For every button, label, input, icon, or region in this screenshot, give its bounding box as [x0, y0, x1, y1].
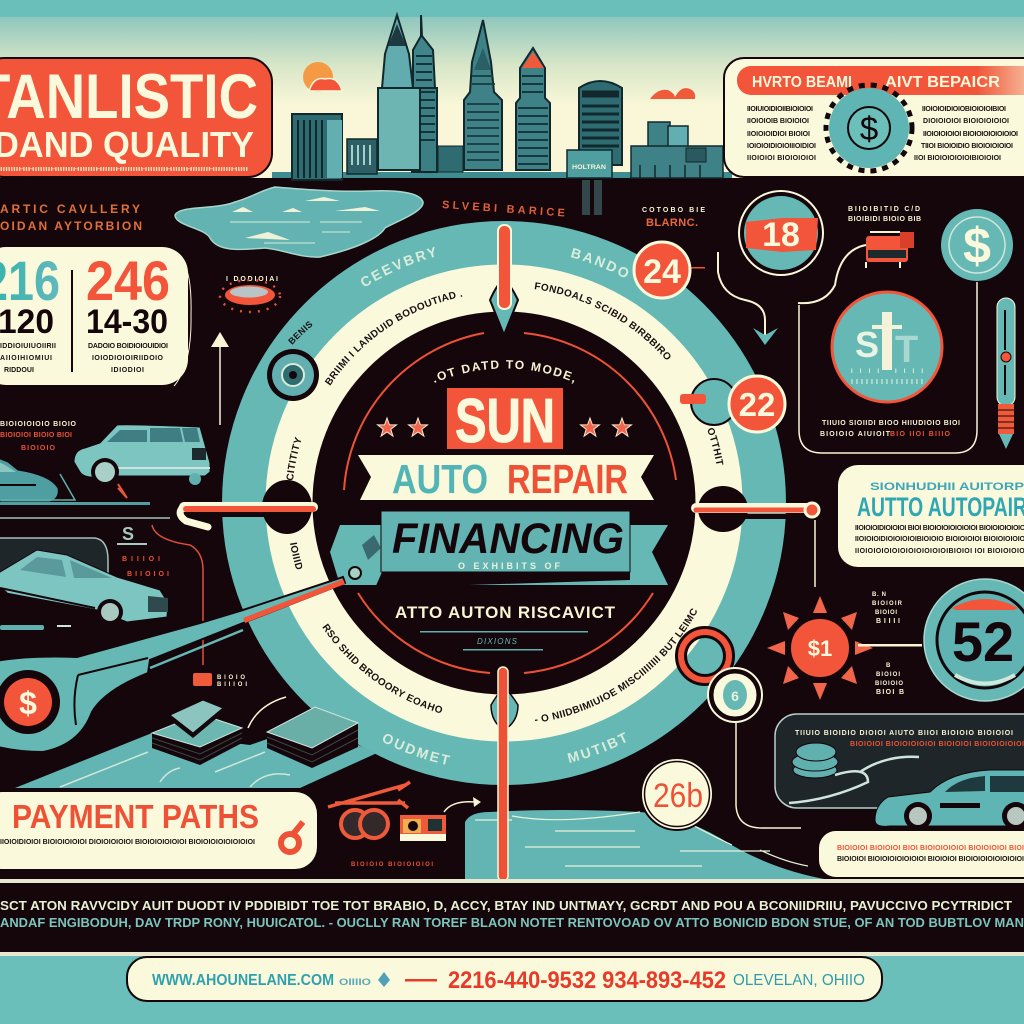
red car icon: [866, 232, 914, 268]
connector to panel: [798, 245, 866, 303]
icon caption: BIOIOIO BIOIOIOIOI: [351, 862, 433, 868]
left lines: [747, 106, 816, 162]
caption above car: [848, 206, 921, 223]
caption above car: BIOIBIDI BIOIO BIB: [848, 216, 921, 223]
gear dollar icon: $: [860, 110, 878, 147]
card lines: IIOIOIOIDIOIOIOI BIOI BIOIOIOIOIOIOIOI BIOIOIOIOIOIOI: [855, 525, 1024, 532]
footer teal: [0, 956, 1024, 1024]
top teal strip: [0, 0, 1024, 17]
curved arrow: [718, 252, 778, 345]
fine print: IDDIOIUIUOIIRII: [0, 343, 56, 350]
sun icon: [303, 62, 342, 92]
stack one: [152, 700, 242, 765]
band captions: IOIIID: [290, 542, 302, 570]
fine print: IOIODIOIOIRIIDOIO: [92, 355, 164, 362]
left lines: IOIOIOIDIOIOIIIOIDIOI: [747, 143, 816, 150]
dollar circle: $: [963, 218, 991, 274]
caption above car: BIIOIBITID C/D: [848, 206, 920, 213]
small caption blue slang: BLARNC.: [646, 217, 698, 229]
goggles: [341, 810, 388, 838]
panel: stats card: [0, 247, 191, 386]
badge 18: 18: [762, 216, 800, 254]
fine print: [0, 343, 168, 374]
right lines: IIOIOIOIOIOI BIOIOIOIOIOIOIOI: [923, 131, 1018, 138]
camera: [400, 815, 446, 841]
red caption: BIOIOIOI BIOIOIOIOIOI BIOIOIOI BIOIOIOIOIOI: [850, 741, 1024, 748]
card stacks: [152, 697, 358, 768]
cable: [789, 757, 919, 803]
ground line: [272, 172, 732, 178]
sun badge: $1: [808, 636, 832, 661]
dial captions: B. N: [872, 592, 886, 598]
bottom pointer: [491, 667, 518, 881]
band captions: CEEVBRY: [361, 246, 435, 286]
dial captions: BIOI B: [876, 689, 904, 696]
badge 22: [680, 376, 785, 432]
low building left: [292, 114, 342, 180]
phone numbers: 2216-440-9532 934-893-452: [448, 967, 726, 994]
subtitle text: OIDAN AYTORBION: [0, 219, 142, 233]
dial captions: BIOIOI: [875, 610, 897, 616]
oval gem icon: [220, 276, 280, 312]
dark line: BIOIOIOI BIOIOIOIOIOIOIOI BIOIOIOI BIOIOIOIOIOIOIOIOI: [837, 856, 1024, 863]
cream inner band: [289, 288, 719, 718]
arched tagline: .OT DATD TO MODE,: [434, 360, 574, 384]
panel caption: TIIUIO SIOIIDI BIOO HIIUDIOIO BIOI: [822, 420, 960, 427]
card lines: IIOIOIOIOIOIOIOIOIOIOIOIBIOIOI IOI BIOIOIOIOI: [855, 548, 1024, 555]
gear dollar icon: [826, 85, 912, 171]
dial captions: BIOIOIR: [872, 601, 903, 607]
left lines: IIOIOIOIDIOI BIOIOI: [747, 131, 810, 138]
subtitle text: ARTIC CAVLLERY: [0, 202, 140, 216]
band captions: RSO SHID BROOORY EOAHO: [322, 624, 442, 713]
right lines: TIIOI BIOIOIDIO BIOIOIOIOIOI: [921, 143, 1013, 150]
ST circle: [832, 292, 942, 402]
stack two: [267, 707, 358, 768]
ST circle: S: [855, 324, 879, 365]
header text right: AIVT BEPAICR: [885, 74, 1000, 91]
panel: lower right note card: [818, 830, 1024, 878]
header text left: HVRTO BEAMI: [752, 74, 852, 91]
handle left: [180, 507, 313, 527]
lake: [175, 187, 423, 257]
dial captions: [872, 592, 904, 696]
cream ribbon: AUTO: [392, 456, 488, 502]
right lines: DIOIOIOIOI BIOIOIOIOIOI: [923, 118, 1009, 125]
dial captions: BIOIOI: [876, 672, 900, 678]
payment fine print: IIOIOIDIOIOI BIOIOIOIOIOI DIOIOIOIOIOI BIOIOIOIOIOIOI BIOIOIOIOIOIOIOIOI: [0, 839, 255, 846]
tower pair: [378, 15, 463, 172]
oval gem icon: I DODIOIAI: [226, 276, 278, 283]
teal road: [15, 733, 377, 788]
left captions: BIOIOIOIOIO BIOIO: [0, 421, 77, 428]
band captions: OUDMET: [383, 734, 450, 764]
left captions: BIOIOIO: [21, 445, 56, 452]
cream ribbon: REPAIR: [507, 456, 628, 502]
connector: [152, 525, 203, 665]
red line: BIOIOIOI BIOIOIOI BIOI BIOIOIOIOIOI BIOIOIOIOI BIOI: [837, 845, 1024, 852]
panel: lower right with car: [775, 714, 1024, 830]
ring caption: SLVEBI BARICE: [442, 199, 567, 220]
left captions: [0, 421, 77, 452]
small legend icon: [193, 673, 247, 688]
wrench dollar: [0, 670, 60, 734]
fine print: RIDDOUI: [4, 367, 34, 374]
notch right: [698, 486, 748, 532]
pier posts: [582, 180, 602, 215]
fine print: IDIODIOI: [111, 367, 144, 374]
band captions: BENIS: [288, 321, 312, 345]
connector down: [736, 722, 801, 828]
left lines: IIOIUIOIDIOIIBIOIOIOI: [747, 106, 813, 113]
wrench pivot: [349, 567, 361, 579]
payment icon: [281, 822, 303, 852]
heading line 2: DAND QUALITY: [0, 124, 254, 165]
website: WWW.AHOUNELANE.COM: [152, 972, 334, 989]
circle 26b: [641, 758, 713, 830]
arrow: [444, 797, 481, 812]
caption: TIIUIO BIOIDIO DIOIOI AIUTO BIIOI BIOIOIO BIOIOIOI: [795, 730, 1013, 737]
stat 246: 246: [86, 249, 170, 312]
dial captions: BIOIOIO: [875, 681, 903, 687]
ST circle: T: [895, 329, 918, 371]
red header pill: [737, 66, 1024, 95]
teal token: [708, 668, 762, 722]
band captions: MUTIBT: [567, 732, 626, 763]
stars: [378, 418, 632, 436]
teal outer band: [244, 243, 764, 763]
emblem rules and small label: DIXIONS: [477, 637, 518, 646]
road dashes: [0, 625, 71, 630]
small teal car: [0, 455, 75, 502]
right lines: IIOIOIOIDIOIOBIOIOIOIBIOI: [922, 106, 1006, 113]
band captions: OTTHIT: [708, 428, 724, 465]
center emblem: [330, 360, 668, 650]
sun badge: [767, 596, 873, 700]
left lines: IIOIOIOIB BIOIOIOI: [747, 118, 809, 125]
central spire tower: [464, 20, 502, 170]
caption: [117, 524, 169, 578]
notch left: [262, 480, 312, 534]
caption: BIIOIOI: [127, 571, 169, 578]
fine print: IIIIIIIHIHIIIIIIHIIIIIIHIIIIIIHIIIIIHIIIIIIIHIIIIIIIHIIIIIHIIIIIIHIIIIIIHIIII: [0, 167, 249, 173]
thermometer gauge: [997, 298, 1015, 449]
water: [465, 810, 830, 880]
small label and diamond: [339, 972, 390, 987]
cream ribbon: [358, 455, 654, 502]
card lines: [855, 525, 1024, 555]
divider: [71, 270, 73, 372]
small legend icon: BIOIO: [217, 675, 245, 681]
central ring: [222, 221, 786, 785]
top pointer: [490, 225, 518, 335]
red-capped tower: [516, 48, 550, 170]
ST circle: IIIIIIIIIIIIIII: [851, 379, 923, 386]
teal ribbon: FINANCING: [392, 515, 624, 563]
teal ribbon: [330, 511, 668, 588]
fine print: AIIOIHIOMIUI: [0, 355, 52, 362]
wrench dollar: $: [19, 685, 37, 721]
dollar circle: [941, 209, 1013, 281]
panel: outlined info: [799, 282, 977, 453]
panel: headline red: [0, 58, 272, 177]
band captions: [286, 246, 724, 764]
left lines: IIOIOIOI BIOIOIOIOI: [747, 155, 816, 162]
small legend icon: BIIIOI: [217, 682, 247, 688]
panel: auto autopair card: [838, 465, 1024, 567]
ST circle: IIII IIII: [851, 369, 923, 375]
car: [875, 770, 1024, 830]
cloud icon: [650, 88, 695, 99]
sky band: [0, 17, 1024, 178]
badge 18: [739, 191, 823, 275]
small caption blue slang: COTOBO BIE: [642, 207, 705, 214]
teal ribbon: O EXHIBITS OF: [458, 561, 560, 571]
band captions: BRIIMI I LANDUID BODOUTIAD .: [324, 292, 462, 386]
fine print: DADOIO BOIDIOIOUIDIOI: [88, 343, 168, 350]
footer text line 1: SCT ATON RAVVCIDY AUIT DUODT IV PDDIBIDT TOE TOT BRABIO, D, ACCY, BTAY IND UNTMAYY, GCRDT AND POU A BCONIIDRIIU, PAVUCCIVO PCYTRIDICT: [0, 898, 1012, 913]
band captions: - O NIIDBIMIUIOE MISCIIIIIIII BUT LEIMC: [534, 608, 697, 722]
wrench: [0, 567, 361, 752]
panel caption 2: BIOIOIO AIUIOIT: [820, 431, 891, 438]
card eyebrow: SIONHUDHII AUITORP: [870, 481, 1024, 493]
road line: [0, 502, 150, 505]
payment heading: PAYMENT PATHS: [12, 798, 259, 835]
band captions: FONDOALS SCIBID BIRBBIRO: [534, 282, 670, 360]
small label and diamond: OIIIIO: [339, 977, 371, 987]
panel: top right card: [724, 58, 1024, 177]
connector to dial: [858, 644, 922, 646]
badge 22: 22: [739, 386, 775, 423]
teal token: 6: [731, 688, 739, 704]
badge 24: [634, 242, 705, 298]
panel: car panel: [0, 518, 203, 665]
city: OLEVELAN, OHIIO: [733, 972, 865, 989]
card lines: IIOIOIOIDIOIOIOIOIBIOIOIO BIOIOIOIOI BIOIOIOIOIOI: [855, 536, 1024, 543]
gap lines: [220, 512, 790, 519]
skyline: [272, 15, 732, 215]
tool icons: [193, 673, 481, 868]
footer contact pill: [127, 957, 882, 1001]
sign building: [567, 150, 612, 178]
arrow up: [211, 332, 229, 425]
wide dark tower: [579, 81, 622, 165]
pliers: [328, 782, 410, 808]
subtitle text: [0, 202, 142, 233]
panel: payment paths: [0, 792, 317, 869]
stat 14-30: 14-30: [86, 303, 168, 341]
road lines: [60, 752, 290, 787]
SUN box: SUN: [455, 387, 555, 456]
caption: BIIIOI: [122, 556, 160, 563]
dial 52: [924, 579, 1024, 701]
dial 52: 52: [952, 610, 1014, 673]
ring knob left: [267, 349, 319, 401]
dash: [405, 979, 437, 982]
right lines: IIOI BIOIOIOIOIOIBIOIOIOI: [914, 155, 1001, 162]
rings lower right: [681, 632, 729, 680]
footer text line 2: ANDAF ENGIBODUH, DAV TRDP RONY, HUUICATOL. - OUCLLY RAN TOREF BLAON NOTET RENTOVOAD OV ATTO BONICID BDON STUE, OF AN TOD BUBTLOV MAN: [0, 915, 1024, 930]
badge 24: 24: [643, 253, 681, 291]
SUV: [74, 425, 210, 498]
dial captions: BIIII: [876, 618, 900, 625]
coin stack: [792, 743, 838, 778]
dial captions: B: [886, 663, 891, 669]
small caption blue slang: [642, 207, 705, 229]
thin red arcs: [344, 333, 676, 673]
footer band: [0, 879, 1024, 956]
small block: [347, 139, 377, 174]
handle right: [696, 503, 819, 587]
low complex right: [631, 122, 723, 178]
panel caption 2: [820, 431, 951, 438]
caption: S: [122, 524, 134, 544]
band captions: CITITITY: [286, 436, 301, 480]
panel caption 2: BIO IIOI BIIIO: [890, 431, 951, 438]
circle 26b: 26b: [653, 777, 703, 815]
left captions: BIOIOIOI BIOIO BIOI: [0, 432, 72, 439]
emblem subtitle: ATTO AUTON RISCAVICT: [395, 603, 616, 622]
right lines: [914, 106, 1018, 162]
curve accent: [248, 697, 286, 728]
big sedan: [0, 550, 168, 625]
sign building: HOLTRAN: [572, 165, 606, 171]
